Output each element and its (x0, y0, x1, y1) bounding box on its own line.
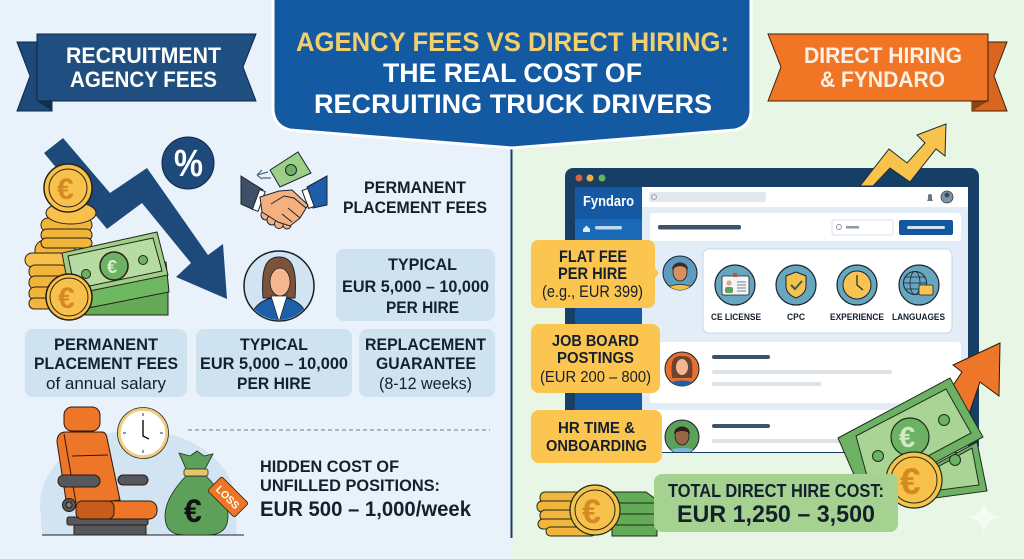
icon: coins and banknotes: € (107, 257, 117, 277)
title text: RECRUITING TRUCK DRIVERS (314, 89, 712, 119)
panel: browser window (565, 168, 979, 453)
callout: HR time and onboarding (531, 410, 662, 463)
panel: typical fee box upper: TYPICAL (388, 255, 457, 274)
browser window dots (576, 174, 606, 182)
panel: typical fee box lower (196, 329, 352, 397)
callout: HR time and onboarding: ONBOARDING (546, 438, 647, 455)
header card (650, 213, 961, 241)
icon: banknotes and coin: € (899, 422, 915, 454)
qualification labels (711, 312, 945, 323)
icon: empty truck seat (57, 407, 157, 535)
icon: coin stack with cash: € (582, 493, 601, 531)
icon: banknotes and coin (838, 378, 987, 508)
right ribbon text (804, 43, 962, 92)
panel: replacement guarantee box (359, 329, 495, 397)
panel: replacement guarantee box: GUARANTEE (376, 354, 476, 373)
panel: typical fee box upper (336, 249, 495, 321)
icon: coins and banknotes (25, 164, 169, 320)
title text: THE REAL COST OF (383, 58, 642, 88)
panel: replacement guarantee box: (8-12 weeks) (379, 374, 472, 393)
callout: HR time and onboarding: HR TIME & (558, 420, 635, 437)
panel: right ribbon heading (768, 34, 1007, 111)
sidebar: Fyndaro (583, 194, 634, 210)
illustration backdrop (40, 430, 237, 535)
icon: rising yellow arrow (860, 124, 946, 186)
left ribbon text (66, 43, 222, 92)
panel: permanent placement box: PERMANENT (54, 335, 159, 354)
panel: title banner (273, 0, 751, 148)
callout: flat fee (531, 240, 659, 308)
qualification labels: CE LICENSE (711, 312, 761, 323)
panel: typical fee box upper: PER HIRE (386, 298, 459, 317)
left ribbon text: RECRUITMENT (66, 43, 222, 68)
callout: job board postings (531, 324, 660, 393)
avatar: candidate three (665, 420, 699, 454)
callout: job board postings: JOB BOARD (552, 333, 639, 350)
icon: percent badge: % (174, 143, 203, 185)
icon: CE license (715, 265, 755, 305)
panel: total direct hire cost: TOTAL DIRECT HIRE COST: (668, 481, 884, 501)
text: permanent placement fees (343, 179, 487, 217)
candidate row three (650, 410, 961, 452)
text: hidden cost: HIDDEN COST OF (260, 458, 399, 476)
text: hidden cost: EUR 500 – 1,000/week (260, 498, 471, 521)
text: permanent placement fees: PLACEMENT FEES (343, 199, 487, 217)
panel: typical fee box upper: EUR 5,000 – 10,000 (342, 277, 489, 296)
panel: permanent placement box: of annual salary (46, 374, 166, 393)
centre divider line (510, 140, 512, 538)
icon: coin stack with cash (537, 485, 657, 536)
title text (296, 27, 729, 119)
qualification labels: CPC (787, 312, 805, 323)
right ribbon text: DIRECT HIRING (804, 43, 962, 68)
icon: banknotes and coin: € (900, 461, 921, 502)
title text: AGENCY FEES VS DIRECT HIRING: (296, 27, 729, 57)
panel: left ribbon heading (17, 34, 256, 111)
callout: flat fee: PER HIRE (558, 265, 627, 283)
icon: percent badge (162, 137, 214, 189)
panel: typical fee box lower: PER HIRE (237, 374, 311, 393)
top bar (642, 187, 968, 207)
icon: wall clock (118, 408, 168, 458)
icon: money bag with loss tag: LOSS (213, 484, 241, 512)
callout: job board postings: (EUR 200 – 800) (540, 369, 651, 386)
left ribbon text: AGENCY FEES (70, 67, 217, 92)
dashed separator (188, 429, 490, 431)
icon: money bag with loss tag: € (184, 493, 202, 529)
candidate row two (650, 342, 961, 403)
panel: typical fee box lower: EUR 5,000 – 10,000 (200, 354, 348, 373)
icon: falling arrow (44, 138, 227, 299)
panel: typical fee box lower: TYPICAL (240, 335, 308, 354)
icon: experience clock (837, 265, 877, 305)
avatar: candidate two (665, 352, 699, 388)
callout: flat fee: FLAT FEE (559, 248, 627, 266)
icon: handshake with banknote (241, 152, 327, 229)
icon: recruiter portrait (244, 251, 314, 322)
icon: CPC shield (776, 265, 816, 305)
sidebar (575, 187, 642, 410)
right ribbon text: & FYNDARO (820, 67, 945, 92)
icon: coins and banknotes: € (57, 173, 74, 206)
callout: flat fee: (e.g., EUR 399) (542, 283, 643, 301)
callout: job board postings: POSTINGS (557, 350, 634, 367)
avatar: candidate one (663, 256, 697, 292)
panel: qualification card (703, 249, 952, 333)
text: hidden cost (260, 458, 471, 521)
text: hidden cost: UNFILLED POSITIONS: (260, 477, 440, 495)
panel: total direct hire cost: EUR 1,250 – 3,500 (677, 501, 875, 528)
panel: permanent placement box (25, 329, 187, 397)
panel: permanent placement box: PLACEMENT FEES (34, 354, 178, 373)
icon: sparkle watermark (968, 501, 1000, 534)
panel: total direct hire cost (654, 474, 898, 532)
qualification labels: LANGUAGES (892, 312, 945, 323)
qualification labels: EXPERIENCE (830, 312, 884, 323)
icon: orange rising arrow (930, 343, 1000, 440)
icon: money bag with loss tag (165, 451, 249, 535)
text: permanent placement fees: PERMANENT (364, 179, 466, 197)
panel: replacement guarantee box: REPLACEMENT (365, 335, 487, 354)
ground line (42, 534, 244, 536)
icon: coins and banknotes: € (58, 282, 75, 315)
icon: languages globe (899, 265, 939, 305)
